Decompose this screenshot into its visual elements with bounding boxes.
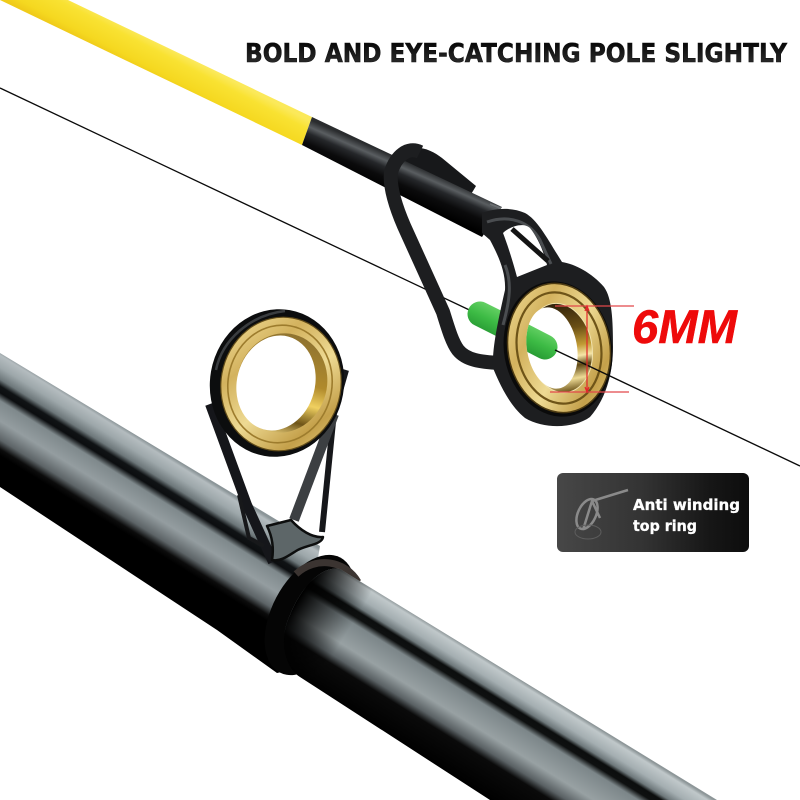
gold ring band [210,308,352,460]
thin section body [284,569,717,800]
badge text line 2: top ring [633,517,697,535]
icon: guide ring sketch [572,490,628,539]
yellow rod tip [0,0,312,145]
ferrule end highlight [490,204,500,222]
left inner leg [239,495,264,546]
badge background [557,473,749,552]
right wire leg [322,370,346,532]
lower guide on main rod [198,298,356,562]
callout badge: anti winding top ring [557,473,749,552]
main rod: thick section [0,353,320,673]
gold ring band [497,275,621,421]
green line marker behind guide [480,314,520,334]
green marker seen through ring [510,329,545,347]
6mm label: 6MM [632,300,738,353]
foot [267,520,323,560]
gold ring groove [219,317,341,451]
top guide: ring plate with gold ring [482,209,623,426]
right grey arm [294,414,334,520]
gold ring inner groove [508,286,610,410]
main rod: thin section [284,569,717,800]
ring opening [226,327,326,439]
6mm dimension marker [550,300,738,392]
black ferrule on yellow rod [302,117,502,237]
fishing line: left and mid section [0,88,480,315]
top guide: back loop behind rod [402,148,476,196]
badge text line 1: Anti winding [633,496,740,514]
ring opening [520,303,584,393]
lower dimension line [550,391,629,393]
top guide: front wire arm [391,150,500,363]
collar body [246,540,374,690]
thin section shadow at collar [284,569,372,697]
upper dimension line [555,305,634,307]
rim highlight [216,311,285,370]
main rod: collar [246,540,374,690]
plate highlight [487,219,551,325]
left wire leg [210,404,273,562]
inner cone [226,323,338,443]
gold ring shadow edge [493,273,623,425]
plate window [503,225,547,277]
guide plate [482,209,613,426]
vertical arrow [585,306,589,392]
collar highlight [296,563,358,582]
fishing line: through ring to the right [555,350,800,466]
wire seen through window [512,229,548,261]
inner cone [521,298,599,398]
ring black rim [198,298,356,468]
